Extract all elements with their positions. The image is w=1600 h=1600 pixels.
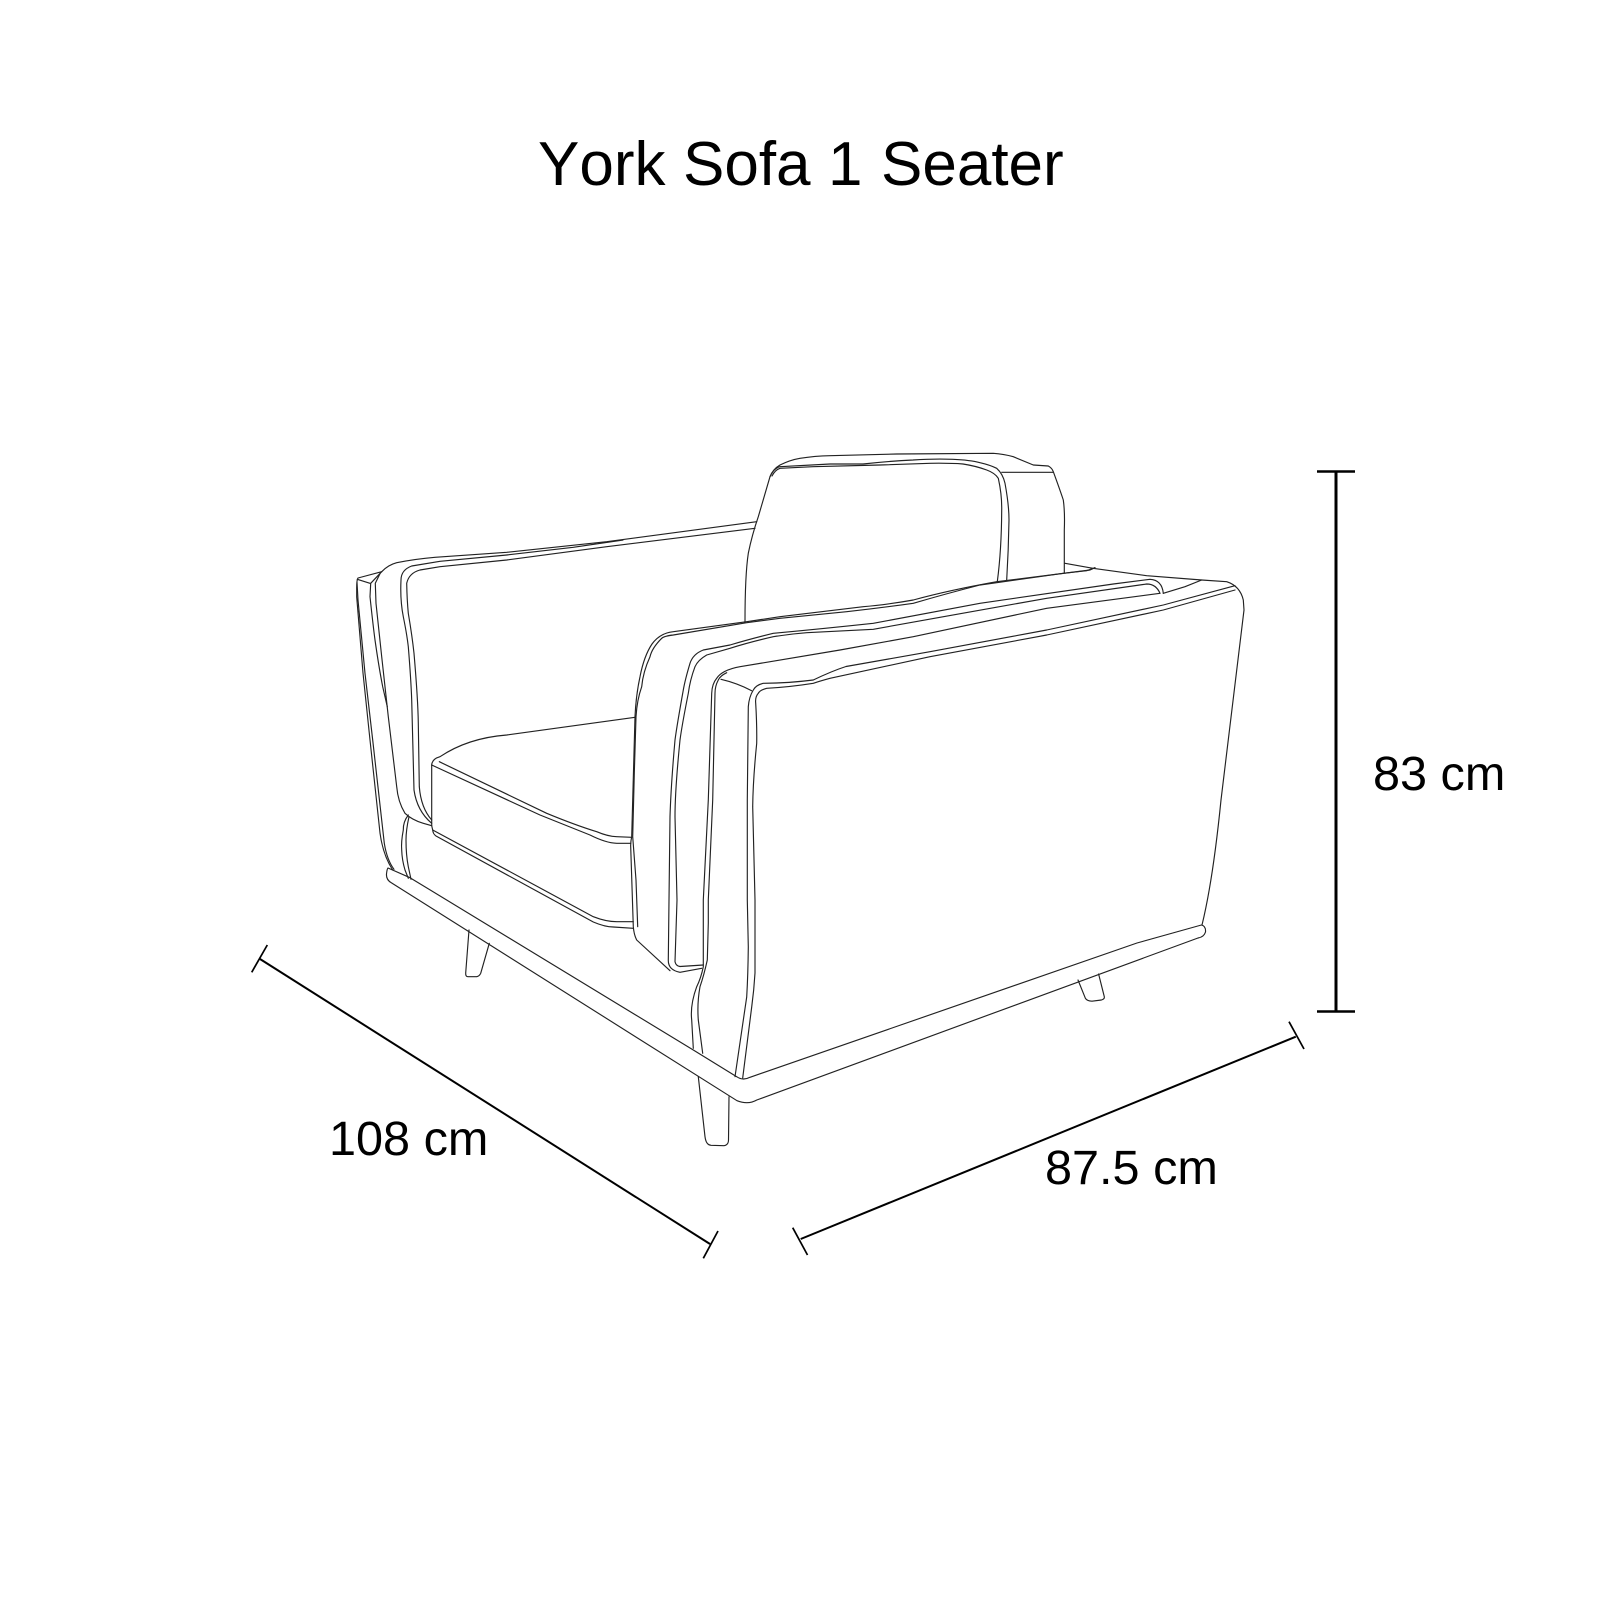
- leg: front: [698, 1077, 729, 1146]
- leg: rear left: [466, 930, 489, 977]
- title: Seater: [881, 130, 1064, 199]
- seat cushion: [432, 717, 635, 928]
- leg: rear right: [1078, 974, 1104, 1001]
- near arm: cushion front and top lines: [631, 568, 1163, 972]
- far arm: top edge and inner piping: [382, 522, 757, 823]
- sofa line drawing: [357, 453, 1244, 1146]
- title: Sofa: [683, 130, 811, 199]
- title: 1: [828, 130, 862, 199]
- label: depth 108 cm: 108 cm: [329, 1112, 488, 1166]
- title: York: [538, 130, 666, 199]
- label: height 83 cm: 83 cm: [1373, 747, 1505, 801]
- back cushion: [745, 453, 1065, 622]
- far arm: outer back panel: [357, 572, 432, 879]
- dimension: depth: [252, 945, 718, 1258]
- dimension: height: [1317, 472, 1355, 1012]
- base rail: [386, 868, 1206, 1103]
- near arm: outer panel and piping: [691, 563, 1244, 1078]
- dimension: width: [793, 1022, 1304, 1255]
- label: width 87.5 cm: 87.5 cm: [1045, 1141, 1218, 1195]
